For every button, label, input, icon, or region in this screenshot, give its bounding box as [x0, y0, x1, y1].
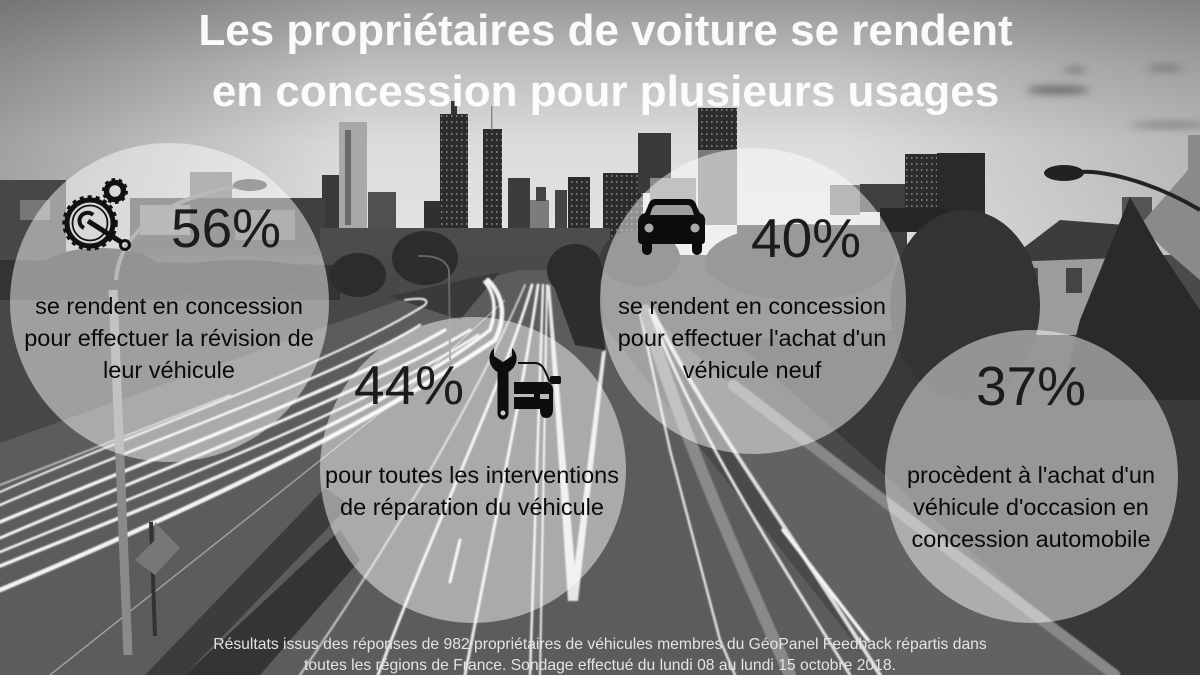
panel: 44% repair circle: [320, 317, 626, 623]
house and trees right: [1005, 255, 1125, 335]
left grass and road: [0, 262, 400, 445]
text: revision: pour effectuer la révision de: [24, 325, 314, 351]
text: revision: leur véhicule: [103, 357, 235, 383]
title: Les propriétaires de voiture se rendent: [198, 6, 1013, 55]
lamp posts and sign: [113, 172, 1200, 655]
skyline: [0, 101, 1152, 288]
title: en concession pour plusieurs usages: [212, 67, 999, 116]
text: used vehicle: concession automobile: [911, 526, 1151, 552]
icon: gears and wrench: [62, 178, 131, 251]
panel: 37% used vehicle circle: [885, 330, 1178, 623]
panel: 56% revision circle: [10, 143, 329, 462]
text: revision: [24, 293, 314, 383]
text: repair: de réparation du véhicule: [340, 494, 604, 520]
light trails left: [0, 280, 502, 590]
text: new vehicle: pour effectuer l'achat d'un: [618, 325, 886, 351]
icon: wrench and car: [489, 348, 561, 420]
trees: [40, 224, 895, 300]
text: repair: pour toutes les interventions: [325, 462, 619, 488]
light trails right: [450, 310, 1115, 675]
56% figure: 56%: [171, 197, 281, 259]
footer source note: Résultats issus des réponses de 982 propriétaires de véhicules membres du GéoPanel Feedback répartis dans: [213, 636, 987, 653]
text: used vehicle: procèdent à l'achat d'un: [907, 462, 1155, 488]
text: repair: [325, 462, 619, 520]
ground base: [0, 255, 1200, 675]
text: used vehicle: véhicule d'occasion en: [913, 494, 1149, 520]
panel: 40% new vehicle circle: [600, 148, 906, 454]
text: used vehicle: [907, 462, 1155, 552]
footer source note: toutes les régions de France. Sondage effectué du lundi 08 au lundi 15 octobre 2018.: [304, 657, 896, 674]
icon: car front: [638, 199, 706, 255]
dark grass between roads: [390, 272, 500, 320]
text: new vehicle: [618, 293, 886, 383]
44% figure: 44%: [354, 354, 464, 416]
40% figure: 40%: [751, 207, 861, 269]
text: revision: se rendent en concession: [35, 293, 303, 319]
right grass: [733, 330, 1200, 675]
light trails centre: [300, 285, 606, 675]
footer source note: [213, 636, 987, 674]
text: new vehicle: véhicule neuf: [683, 357, 821, 383]
37% figure: 37%: [976, 355, 1086, 417]
text: new vehicle: se rendent en concession: [618, 293, 886, 319]
title: [198, 6, 1013, 116]
